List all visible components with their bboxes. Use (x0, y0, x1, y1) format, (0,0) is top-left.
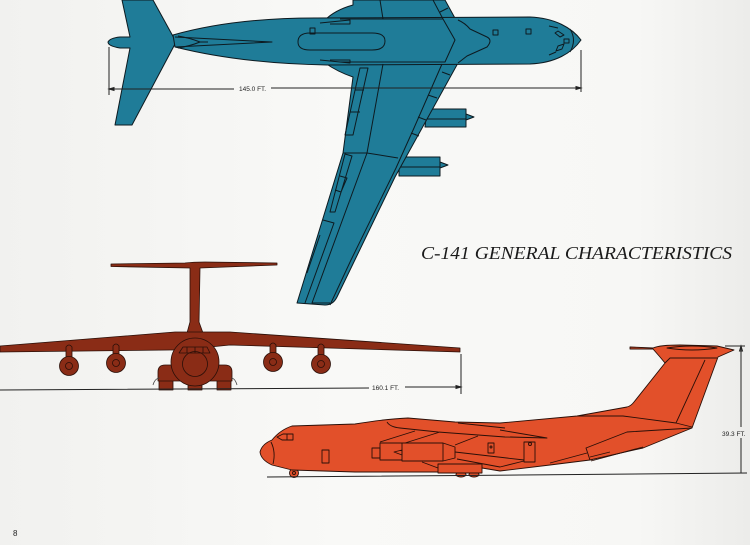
engine: lower right (399, 157, 448, 176)
dimension: 160.1 ft span: 160.1 FT. (372, 385, 399, 392)
top view aircraft in blue (108, 0, 581, 305)
page number: 8 (13, 529, 18, 538)
dimension: 145.0 ft length: 145.0 FT. (239, 86, 266, 93)
cockpit and radome detail (179, 347, 210, 376)
gear struts (153, 378, 237, 385)
fuselage (173, 17, 581, 65)
landing gear pods (158, 365, 232, 390)
engine: upper right (425, 109, 474, 127)
upper wing stub (325, 0, 456, 20)
tailplane (108, 0, 175, 125)
title: C-141 GENERAL CHARACTERISTICS (421, 243, 732, 263)
fuselage front (171, 338, 219, 386)
fuselage and fin (260, 345, 734, 472)
wing and fuselage detail lines (175, 0, 574, 305)
wings (0, 332, 460, 352)
front view aircraft in dark red (0, 262, 460, 390)
dimension: 160.1 ft span (0, 354, 461, 394)
side view aircraft in orange (260, 345, 734, 478)
dimension: 39.3 ft height: 39.3 FT. (722, 431, 746, 438)
dimension: 39.3 ft height (267, 346, 747, 477)
fuselage and wing detail (271, 346, 717, 468)
lower wing (297, 63, 458, 305)
T-tail and fin (111, 262, 277, 333)
sponson (438, 464, 482, 473)
dimension: 145.0 ft length (109, 47, 581, 95)
wheels (290, 468, 479, 478)
engine pylons and pods (60, 343, 330, 376)
